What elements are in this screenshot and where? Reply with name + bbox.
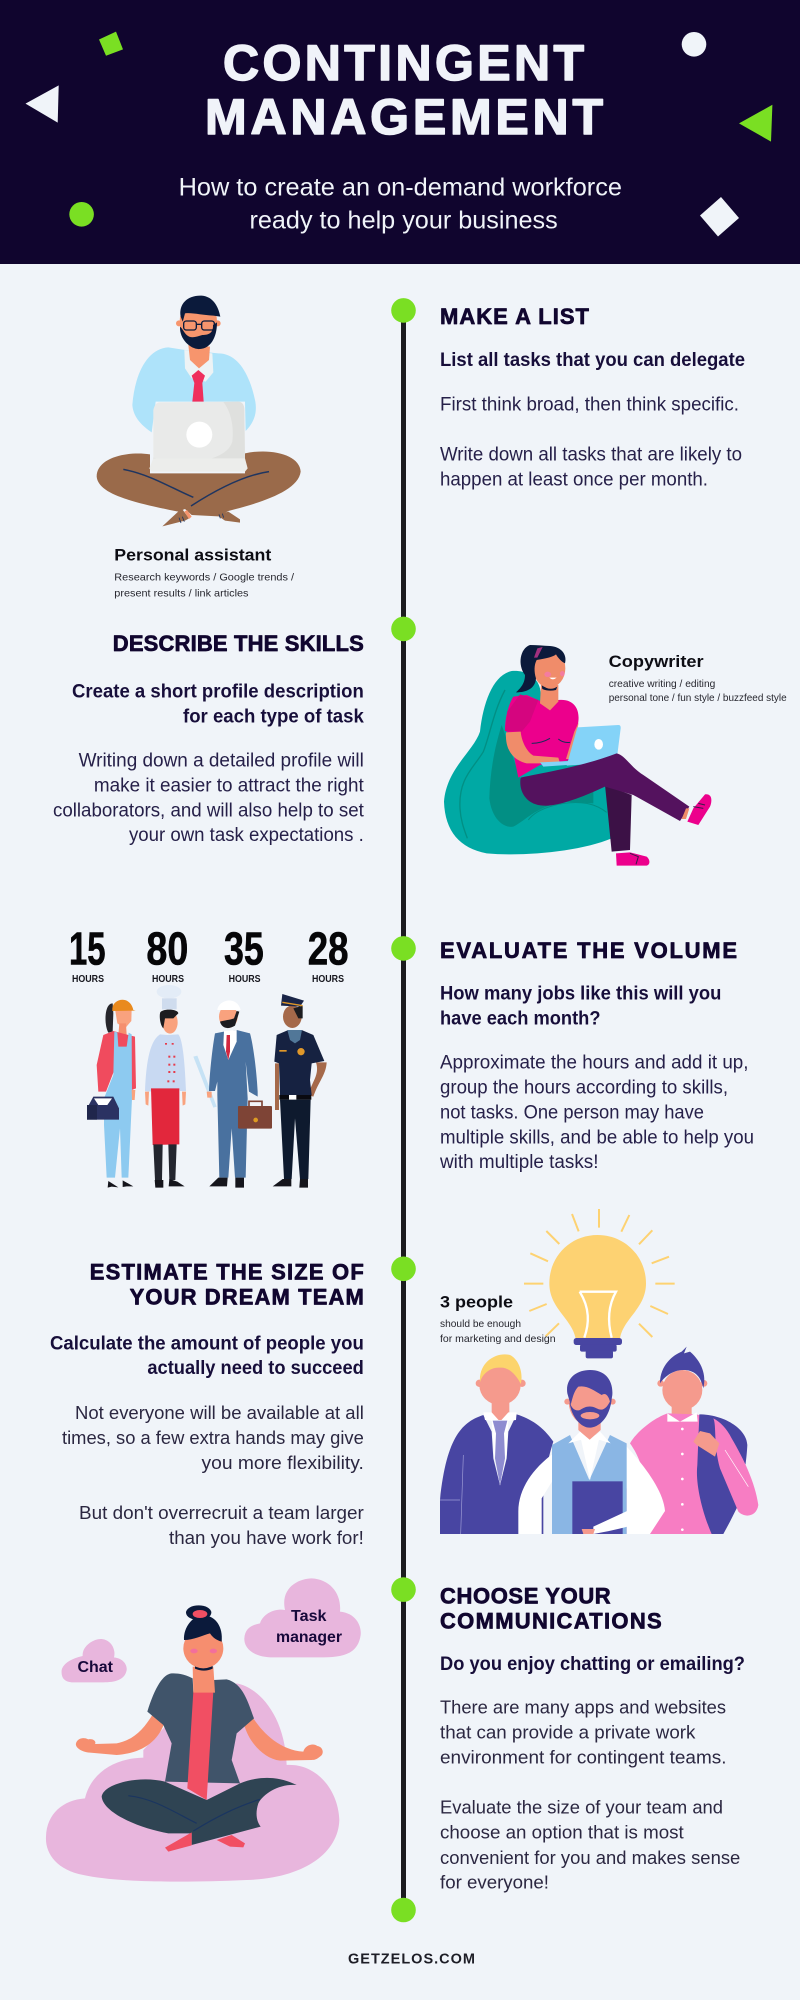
subtitle [179,174,622,234]
caption: 3 people: for marketing and design [440,1333,556,1345]
big cloud [46,1683,339,1882]
chart: hours per worker: HOURS [312,974,344,985]
man with vest and book [518,1370,665,1534]
text block [440,1698,740,1893]
icon: light bulb [524,1209,675,1358]
chart: hours per worker: 15 [69,923,106,975]
text block [440,394,742,491]
text block: that can provide a private work [440,1722,696,1742]
caption: personal assistant: Research keywords / Google trends / [114,572,294,584]
illustration: four workers [87,985,327,1188]
heading [90,1260,364,1310]
text block: Evaluate the size of your team and [440,1798,723,1818]
icon: white circle [682,32,706,57]
text block: make it easier to attract the right [94,775,365,796]
text block: choose an option that is most [440,1822,684,1842]
cloud labels [78,1608,342,1676]
text block: happen at least once per month. [440,470,708,491]
text block: you more flexibility. [202,1453,364,1473]
text block: than you have work for! [169,1528,364,1548]
task cloud [244,1578,361,1657]
man in suit [440,1354,553,1534]
text block: Writing down a detailed profile will [79,750,364,772]
chat cloud [62,1639,127,1682]
chart: hours per worker: 35 [224,923,264,975]
subheading: Create a short profile description [72,681,364,702]
chart: hours per worker [69,923,348,985]
subheading [50,1333,364,1379]
title: MANAGEMENT [205,89,603,145]
panel: estimate the size [50,1260,364,1548]
subheading: actually need to succeed [147,1358,364,1379]
text block: with multiple tasks! [439,1152,598,1173]
text block: multiple skills, and be able to help you [440,1127,754,1148]
text block: But don't overrecruit a team larger [79,1503,364,1523]
caption: personal assistant: Personal assistant [114,546,272,564]
icon: green triangle [739,105,772,142]
subheading: How many jobs like this will you [440,983,721,1004]
title [205,35,603,145]
panel: describe the skills [53,631,365,846]
text block [53,750,365,846]
cloud labels: manager [276,1629,342,1646]
heading: CHOOSE YOUR [440,1584,611,1609]
chart: hours per worker: HOURS [152,974,184,985]
subheading: Do you enjoy chatting or emailing? [440,1654,745,1675]
text block: First think broad, then think specific. [440,394,739,415]
text block: There are many apps and websites [440,1698,726,1718]
text block: Write down all tasks that are likely to [440,445,742,466]
caption: copywriter: Copywriter [609,653,704,671]
panel: make a list [440,304,745,491]
timeline [391,298,416,1922]
text block: group the hours according to skills, [440,1078,728,1098]
icon: white triangle [26,85,59,123]
text block: Not everyone will be available at all [75,1403,364,1423]
caption: personal assistant: present results / link articles [114,587,248,599]
heading: EVALUATE THE VOLUME [440,938,737,963]
text block: not tasks. One person may have [440,1102,704,1123]
worker 1 [87,1000,136,1188]
subtitle: ready to help your business [250,206,558,234]
cloud labels: Chat [78,1659,114,1676]
subheading: for each type of task [183,707,364,728]
text block [62,1403,364,1548]
subtitle: How to create an on-demand workforce [179,174,622,202]
heading: DESCRIBE THE SKILLS [113,631,364,656]
cloud labels: Task [291,1608,327,1625]
woman [76,1605,323,1852]
chart: hours per worker: 28 [308,923,348,975]
illustration: team and light bulb [440,1209,758,1534]
panel: choose your communications [440,1584,745,1893]
text block: convenient for you and makes sense [440,1848,740,1868]
icon: green circle [69,202,94,227]
panel: evaluate the volume [439,938,754,1173]
subheading [440,983,721,1029]
heading: ESTIMATE THE SIZE OF [90,1260,364,1285]
text block: your own task expectations . [129,825,364,846]
text block [439,1053,754,1173]
subheading: have each month? [440,1008,600,1029]
footer: GETZELOS.COM [348,1951,475,1967]
subheading: List all tasks that you can delegate [440,350,745,371]
text block: for everyone! [440,1873,549,1893]
caption: copywriter [609,653,787,704]
worker 4 [273,994,327,1188]
illustration: man with laptop [97,296,301,526]
subheading [72,681,364,728]
chart: hours per worker: HOURS [72,974,104,985]
icon: white diamond [700,197,739,236]
icon: green square [99,32,123,56]
caption: 3 people [440,1294,556,1345]
caption: 3 people: should be enough [440,1318,521,1330]
text block: environment for contingent teams. [440,1747,726,1767]
illustration: woman on beanbag [444,645,711,866]
heading: COMMUNICATIONS [440,1608,662,1634]
text block: collaborators, and will also help to set [53,800,364,821]
subheading: Calculate the amount of people you [50,1333,364,1354]
panel: header banner [0,0,800,264]
caption: personal assistant [114,546,294,599]
heading: YOUR DREAM TEAM [130,1285,364,1310]
worker 3 [193,1001,272,1188]
chart: hours per worker: 80 [146,923,188,975]
title: CONTINGENT [223,35,584,91]
chart: hours per worker: HOURS [229,974,261,985]
heading: MAKE A LIST [440,304,590,329]
worker 2 [145,985,186,1188]
heading [440,1584,662,1634]
caption: 3 people: 3 people [440,1294,513,1312]
text block: times, so a few extra hands may give [62,1428,364,1448]
caption: copywriter: personal tone / fun style / buzzfeed style [609,692,787,704]
text block: Approximate the hours and add it up, [440,1053,748,1074]
illustration: meditating woman with clouds [46,1578,361,1882]
man with backpack [630,1347,758,1534]
caption: copywriter: creative writing / editing [609,678,715,690]
